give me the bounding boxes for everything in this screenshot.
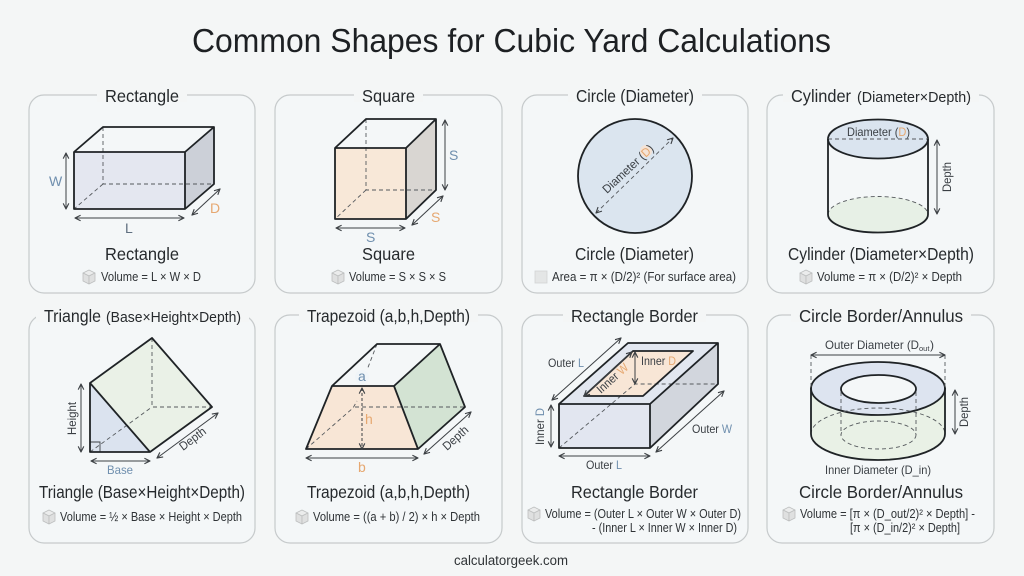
formula: rectangle border volume — [528, 507, 741, 535]
diagram: rectangular border: Inner D — [533, 408, 547, 445]
diagram: annulus — [811, 338, 971, 477]
diagram: rectangular border: Outer L — [586, 458, 622, 472]
title: Common Shapes for Cubic Yard Calculations — [192, 22, 831, 59]
formula: rectangle border volume: - (Inner L × Inner W × Inner D) — [592, 521, 737, 535]
label: rectangle: Rectangle — [105, 244, 179, 264]
diagram: rectangular box: L — [125, 220, 133, 236]
diagram: rectangular border: Inner W — [594, 360, 632, 396]
label: triangle: Triangle (Base×Height×Depth) — [39, 482, 245, 502]
diagram: annulus: Inner Diameter (D_in) — [825, 463, 931, 477]
diagram: triangular prism: Height — [65, 401, 79, 435]
diagram: cylinder: Diameter (D) — [847, 125, 910, 139]
diagram: cube: S — [449, 147, 458, 163]
footer: source: calculatorgeek.com — [454, 553, 568, 568]
diagram: triangular prism — [65, 338, 218, 477]
diagram: annulus: out — [919, 344, 930, 353]
diagram: circle: Diameter (D) — [599, 142, 657, 196]
panel: cylinder — [767, 86, 994, 293]
diagram: trapezoidal prism — [306, 344, 471, 475]
heading: cylinder: Cylinder — [791, 86, 851, 106]
diagram: rectangular border: Inner D — [641, 354, 676, 368]
diagram: rectangular box: W — [49, 173, 63, 189]
label: rectangle border: Rectangle Border — [571, 482, 698, 502]
panel: rectangle — [29, 86, 255, 293]
diagram: triangular prism: Depth — [176, 424, 209, 453]
formula: rectangle border volume: Volume = (Outer L × Outer W × Outer D) — [545, 507, 741, 521]
formula: circle border volume: Volume = [π × (D_out/2)² × Depth] - — [800, 507, 975, 521]
formula: circle border volume: [π × (D_in/2)² × Depth] — [850, 521, 960, 535]
diagram: cube: S — [431, 209, 440, 225]
diagram: cube: S — [366, 229, 375, 245]
heading: triangle: Triangle — [44, 306, 101, 326]
panel: triangle — [29, 306, 255, 543]
diagram: triangular prism: Base — [107, 463, 133, 477]
diagram: rectangular box: D — [210, 200, 220, 216]
panel: triangle: (Base×Height×Depth) — [106, 309, 241, 326]
diagram: annulus: ) — [930, 338, 934, 352]
diagram: annulus: Outer Diameter (D — [825, 338, 919, 352]
formula: rectangle volume: Volume = L × W × D — [101, 270, 201, 284]
diagram: cylinder — [828, 120, 954, 232]
panel: circle — [522, 86, 748, 293]
formula: triangle volume: Volume = ½ × Base × Height × Depth — [60, 510, 242, 524]
diagram: rectangular border: Outer W — [692, 422, 733, 436]
diagram: cube — [335, 119, 458, 245]
formula: cylinder volume: Volume = π × (D/2)² × Depth — [817, 270, 962, 284]
heading: circle border: Circle Border/Annulus — [799, 306, 963, 326]
label: circle: Circle (Diameter) — [575, 244, 694, 264]
panel: rectangle border — [522, 306, 748, 543]
heading: trapezoid: Trapezoid (a,b,h,Depth) — [307, 306, 470, 326]
formula: circle border volume — [783, 507, 975, 535]
diagram: rectangular border — [533, 338, 733, 472]
diagram: trapezoidal prism: h — [365, 411, 373, 427]
diagram: circle — [578, 119, 692, 233]
formula: circle area: Area = π × (D/2)² (For surface area) — [552, 270, 736, 284]
formula: square volume: Volume = S × S × S — [349, 270, 446, 284]
heading: square: Square — [362, 86, 415, 106]
label: square: Square — [362, 244, 415, 264]
diagram: rectangular box — [49, 127, 220, 236]
panel: cylinder: (Diameter×Depth) — [857, 89, 971, 106]
diagram: rectangular border: Outer L — [548, 356, 584, 370]
diagram: cylinder: Depth — [940, 162, 954, 192]
label: circle border: Circle Border/Annulus — [799, 482, 963, 502]
diagram: trapezoidal prism: Depth — [440, 423, 471, 453]
heading: rectangle border: Rectangle Border — [571, 306, 698, 326]
diagram: annulus: Depth — [957, 397, 971, 427]
panel: square — [275, 86, 502, 293]
panel: trapezoid — [275, 306, 502, 543]
label: cylinder: Cylinder (Diameter×Depth) — [788, 244, 974, 264]
heading: rectangle: Rectangle — [105, 86, 179, 106]
heading: circle: Circle (Diameter) — [576, 86, 694, 106]
diagram: trapezoidal prism: a — [358, 368, 366, 384]
formula: trapezoid volume: Volume = ((a + b) / 2) × h × Depth — [313, 510, 480, 524]
diagram: trapezoidal prism: b — [358, 459, 366, 475]
panel: circle border — [767, 306, 994, 543]
label: trapezoid: Trapezoid (a,b,h,Depth) — [307, 482, 470, 502]
